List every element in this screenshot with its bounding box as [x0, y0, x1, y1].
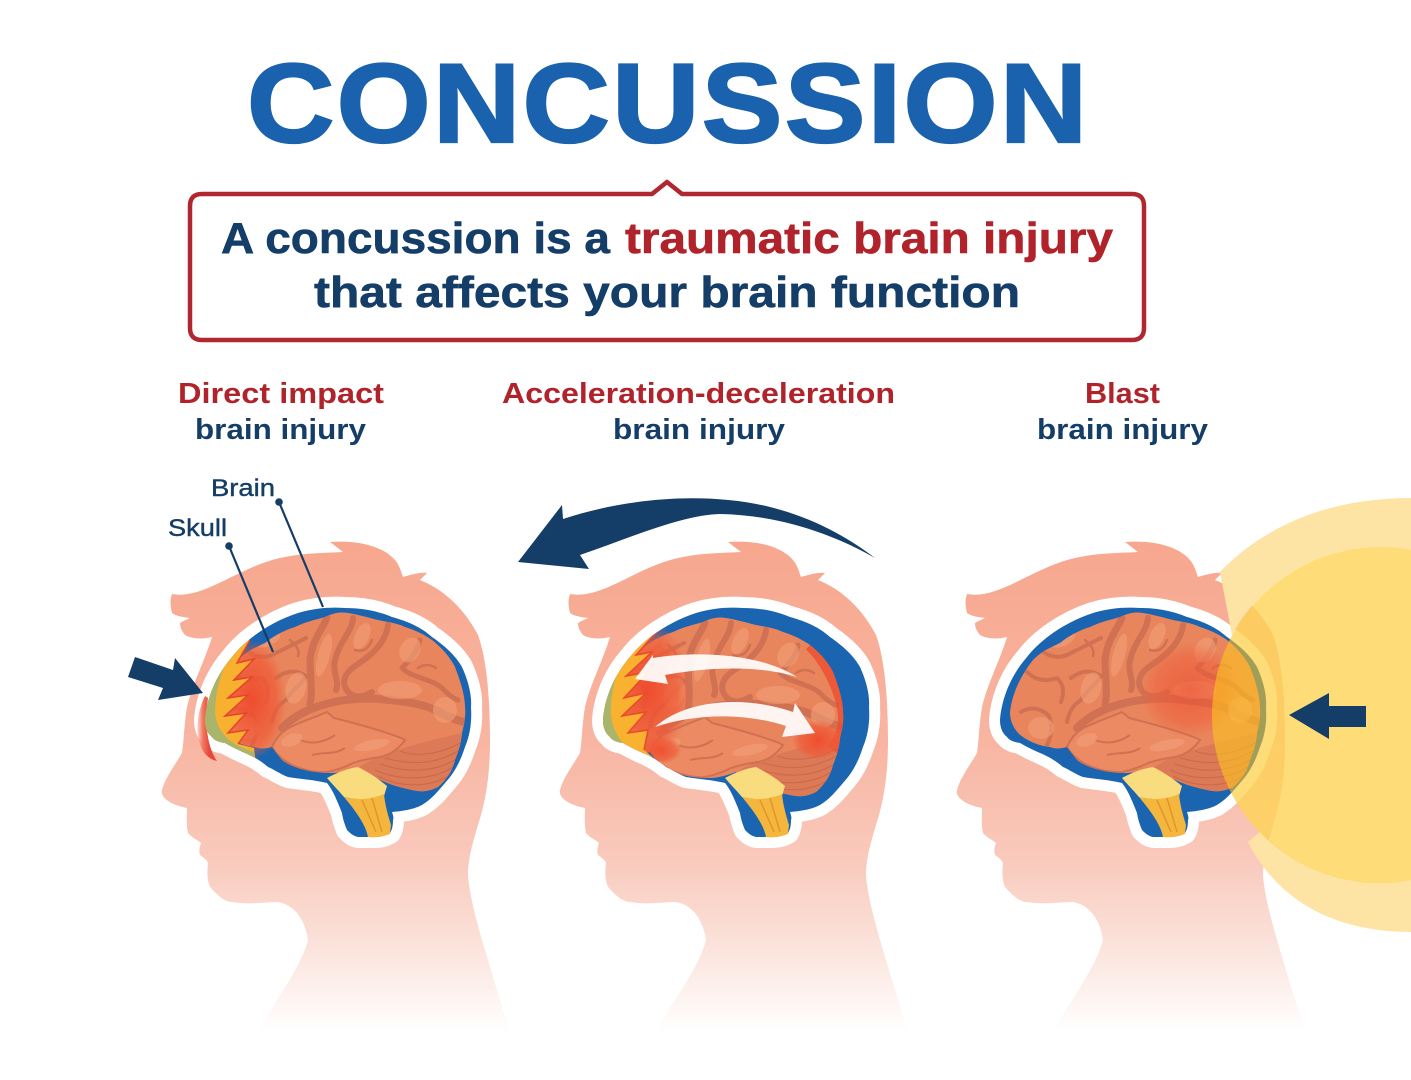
heading: acceleration-deceleration: brain injury [613, 414, 785, 446]
label: skull [168, 515, 273, 652]
callout line 1: traumatic brain injury [625, 214, 1114, 263]
skull cavity [603, 608, 869, 837]
brainstem [1122, 767, 1186, 837]
heading: blast [1037, 378, 1208, 446]
skull cavity [1000, 608, 1266, 837]
heading: blast: brain injury [1037, 414, 1208, 446]
blast tint [1146, 647, 1222, 732]
arrow: blast [1289, 693, 1366, 739]
brain [1010, 612, 1260, 795]
heading: direct impact [178, 378, 384, 446]
label: skull: Skull [168, 515, 227, 542]
overlap lightening [1236, 606, 1285, 840]
title: CONCUSSION [247, 40, 1087, 166]
inner wave [1212, 547, 1411, 883]
label: brain [211, 475, 323, 607]
arrow: impact [128, 657, 203, 700]
callout outline [190, 182, 1144, 340]
heading: blast: Blast [1085, 378, 1160, 410]
front tint [615, 628, 686, 758]
forehead bruise [197, 696, 217, 761]
brainstem [725, 767, 789, 837]
head silhouette [957, 542, 1305, 1032]
impact zone [205, 640, 283, 758]
brainstem [327, 767, 391, 837]
blast wave [1212, 498, 1411, 932]
front zigzag [603, 633, 656, 760]
heading: direct impact: Direct impact [178, 378, 384, 410]
skull cavity [205, 608, 471, 837]
label: brain: Brain [211, 475, 275, 502]
heading: acceleration-deceleration [502, 378, 895, 446]
arrow: motion backward [635, 654, 797, 684]
callout line 1 [221, 214, 1114, 263]
callout line 1: A concussion is a [221, 214, 611, 263]
brain [215, 612, 465, 795]
head 2: acceleration-deceleration [560, 542, 908, 1032]
rebound injury [638, 645, 844, 764]
arrow: motion forward [655, 702, 815, 737]
head silhouette [560, 542, 908, 1032]
heading: acceleration-deceleration: Acceleration-deceleration [502, 378, 895, 410]
callout line 2: that affects your brain function [314, 268, 1020, 317]
head silhouette [162, 542, 510, 1032]
head 3: blast [956, 542, 1298, 1012]
head 1: direct impact [128, 475, 510, 1032]
outer wave lower [1248, 832, 1411, 932]
outer wave upper [1220, 498, 1411, 635]
callout box [190, 182, 1144, 340]
arrow: head motion [518, 498, 875, 569]
brain shifted forward [593, 617, 844, 800]
heading: direct impact: brain injury [195, 414, 366, 446]
